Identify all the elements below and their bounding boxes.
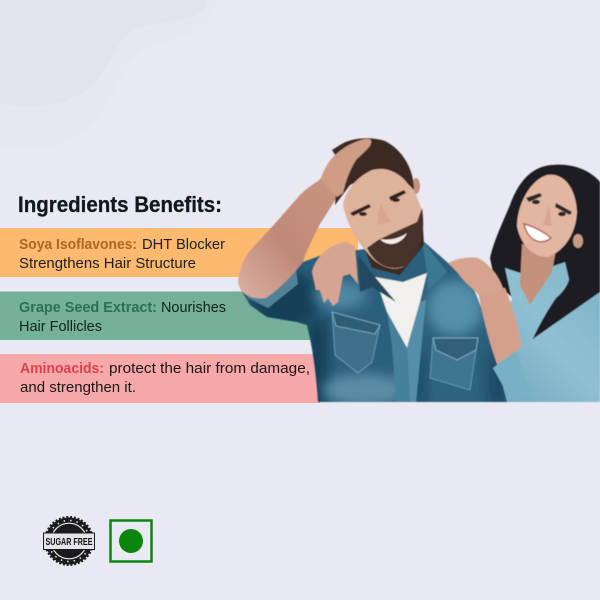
woman hand on man's left shoulder — [312, 242, 358, 306]
woman shirt — [480, 262, 600, 402]
title: Ingredients Benefits: — [18, 192, 222, 217]
text: aminoacids — [20, 361, 310, 396]
man nose shade — [377, 203, 391, 225]
woman sleeve — [493, 292, 600, 402]
icon: vegetarian mark — [110, 520, 152, 562]
woman face — [517, 175, 577, 257]
man pockets — [332, 312, 380, 373]
woman nose shade — [543, 205, 552, 226]
man hair — [332, 138, 414, 198]
man white t-shirt — [375, 273, 427, 348]
man hand over hair — [321, 139, 371, 197]
man torso denim base — [240, 240, 507, 402]
text: grape seed extract: Grape Seed Extract: — [19, 300, 157, 316]
woman ear — [573, 234, 583, 248]
man beard neck — [358, 212, 424, 275]
woman smile — [524, 224, 551, 242]
text: aminoacids: Aminoacids: — [20, 361, 104, 377]
text: soya isoflavones: Soya Isoflavones: — [19, 237, 137, 253]
photo: smiling couple — [238, 138, 600, 410]
woman hair back — [490, 165, 600, 352]
text: aminoacids: protect the hair from damage, — [109, 361, 310, 377]
text: soya isoflavones — [19, 237, 225, 272]
panel: grape seed extract band — [0, 292, 320, 340]
man beard — [367, 208, 423, 268]
panel: soya isoflavones band — [0, 228, 358, 277]
man placket — [387, 312, 410, 402]
text: aminoacids: and strengthen it. — [20, 380, 136, 396]
man collars — [358, 255, 396, 302]
text: grape seed extract: Hair Follicles — [19, 319, 102, 335]
text: grape seed extract — [19, 300, 226, 335]
badge: sugar free: SUGAR FREE — [46, 537, 93, 548]
woman forearm — [478, 288, 522, 364]
decorative blob top left — [0, 0, 216, 150]
man face — [343, 169, 422, 269]
woman hand on man's shoulder — [448, 257, 503, 296]
man raised arm — [238, 178, 337, 298]
man smile — [380, 233, 407, 244]
woman eyes and brows — [526, 193, 572, 216]
man sleeve cuff — [246, 270, 298, 308]
man ear — [412, 178, 420, 194]
woman neck and chest — [520, 244, 556, 305]
man hair under — [335, 150, 414, 205]
woman sleeve cuff — [493, 351, 530, 402]
text: soya isoflavones: DHT Blocker — [142, 237, 225, 253]
man brows and eyes — [350, 190, 406, 216]
text: soya isoflavones: Strengthens Hair Structure — [19, 256, 196, 272]
badge: sugar free — [44, 517, 94, 565]
panel: aminoacids band — [0, 354, 320, 403]
man torso shading — [250, 270, 510, 410]
text: grape seed extract: Nourishes — [161, 300, 226, 316]
